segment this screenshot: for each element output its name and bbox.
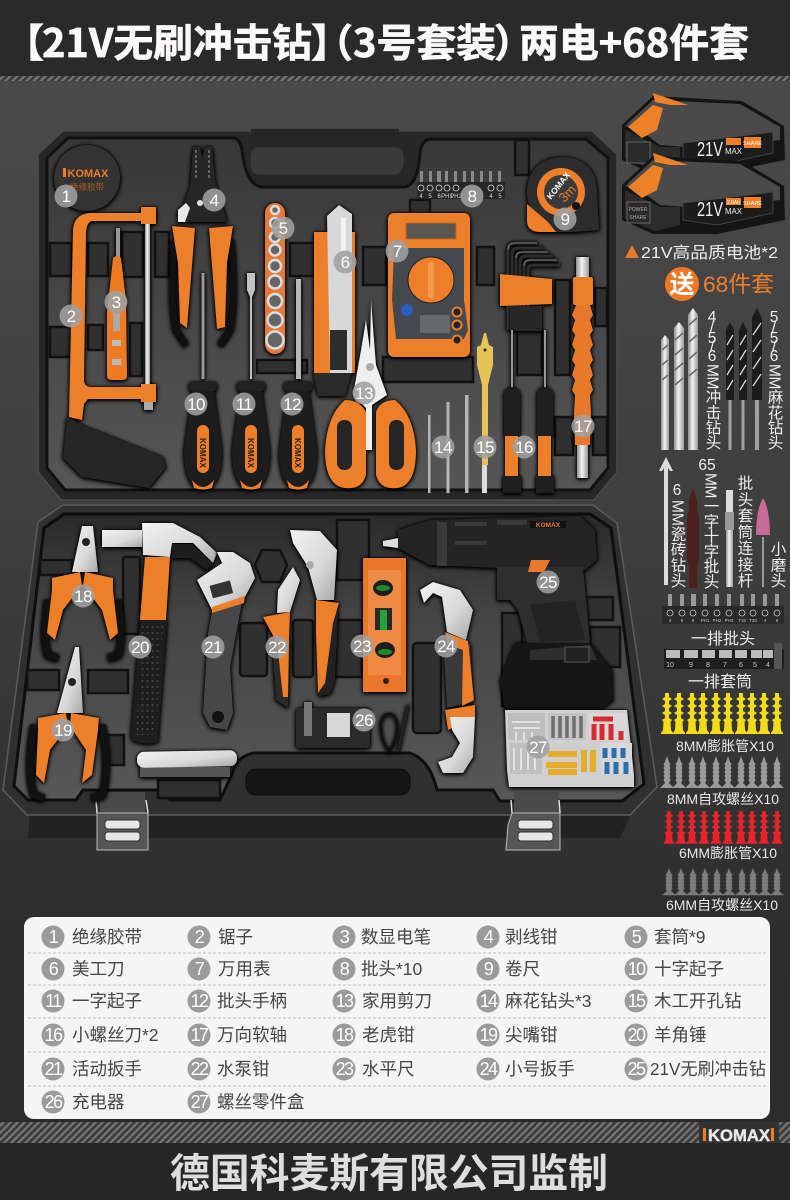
caption: 8MM expansion anchors: 8MM膨胀管X10 — [676, 738, 774, 754]
bit row with labels: 5 — [776, 618, 779, 623]
badge 4: 4 — [210, 191, 219, 210]
legend row 5: 小号扳手 — [505, 1059, 575, 1079]
open tool case: upper lid — [38, 128, 617, 500]
tool 27: screw parts box — [505, 710, 634, 787]
badge 16 — [512, 436, 536, 458]
legend row 2 — [42, 958, 724, 980]
footer KOMAX logo — [699, 1122, 779, 1145]
badge 24: 24 — [437, 637, 455, 656]
badge 3 — [104, 290, 128, 314]
impact drill bits 4/5/6MM — [661, 308, 721, 450]
bit row with labels: 5 — [681, 618, 684, 623]
caption: 6MM self-tapping screws: 6MM自攻螺丝X10 — [666, 897, 778, 913]
tool 6: utility knife — [313, 205, 355, 396]
tool 2: hacksaw — [63, 207, 166, 488]
battery front: SHARE — [629, 215, 647, 221]
legend row 4: 老虎钳 — [362, 1025, 414, 1045]
legend row 6: 27 — [191, 1092, 209, 1112]
tool 11: flat screwdriver: KOMAX — [246, 438, 255, 468]
legend row 4: 万向软轴 — [217, 1025, 287, 1045]
legend row 3: 13 — [336, 991, 354, 1011]
tool 1: insulating tape: 绝缘胶带 — [70, 182, 104, 192]
tool 8: bit row: PH1 — [441, 194, 453, 200]
open tool case: lower tray — [3, 505, 657, 850]
badge 25: 25 — [539, 573, 557, 592]
title: 21V无刷冲击钻 — [42, 13, 312, 69]
tool 1: insulating tape: KOMAX — [68, 168, 109, 180]
tile drill bit 6MM: 6 — [673, 482, 681, 499]
tool 7: digital multimeter — [388, 213, 470, 357]
impact drill bits 4/5/6MM: 4 — [708, 309, 717, 326]
badge 16: 16 — [515, 438, 533, 457]
badge 2: 2 — [67, 307, 76, 326]
legend row 3: 一字起子 — [72, 991, 142, 1011]
free gift badge — [665, 267, 774, 301]
legend row 5: 22 — [191, 1059, 209, 1079]
impact drill bits 4/5/6MM: / — [710, 339, 715, 356]
tool 10: cross screwdriver: KOMAX — [198, 438, 207, 468]
battery caption: 21V高品质电池*2 — [641, 244, 778, 262]
badge 24 — [434, 634, 458, 658]
legend row 4: 尖嘴钳 — [505, 1025, 558, 1045]
tool 8: bit row: 5 — [498, 194, 502, 200]
legend row 5: 水平尺 — [362, 1059, 414, 1079]
legend row 1: 绝缘胶带 — [72, 927, 142, 947]
legend row 1: 3 — [340, 927, 350, 947]
latches — [96, 792, 560, 850]
battery front: POWER — [629, 207, 648, 213]
legend row 4: 羊角锤 — [654, 1025, 706, 1045]
battery front: MAX — [725, 207, 743, 216]
battery front: SHARE — [743, 201, 762, 207]
socket row: 9 — [689, 662, 693, 669]
twist drill bits 5/5/6MM: MM麻花钻头 — [766, 364, 783, 450]
badge 25 — [536, 570, 560, 594]
badge 19 — [52, 718, 74, 742]
badge 13 — [352, 382, 376, 404]
legend row 5: 水泵钳 — [217, 1059, 270, 1079]
tool 8: bit row: 4 — [489, 194, 493, 200]
legend row 5: 23 — [336, 1059, 354, 1079]
badge 14 — [432, 436, 454, 458]
socket row: 8 — [706, 662, 710, 669]
legend row 3 — [42, 990, 742, 1012]
badge 11: 11 — [236, 395, 252, 414]
red 6MM expansion anchors — [664, 811, 782, 844]
bit row with labels: 6 — [692, 618, 695, 623]
legend row 3: 麻花钻头*3 — [505, 991, 592, 1011]
legend row 1: 2 — [195, 927, 205, 947]
tool 18: combination pliers — [45, 526, 121, 658]
legend row 4 — [42, 1024, 706, 1046]
badge 27: 27 — [529, 738, 547, 757]
battery front: 21V — [697, 199, 723, 221]
badge 9: 9 — [561, 210, 570, 229]
legend row 2: 9 — [484, 959, 494, 979]
tool 8: bit row — [417, 171, 505, 200]
legend row 5: 21 — [45, 1059, 63, 1079]
socket adapter rod — [725, 475, 753, 588]
tool 8: bit row: 5 — [428, 194, 432, 200]
legend row 3: 12 — [191, 991, 209, 1011]
badge 11 — [232, 392, 256, 416]
legend row 6: 充电器 — [72, 1092, 124, 1112]
lid tray pockets — [50, 140, 607, 455]
twist drill bits 5/5/6MM: 5 — [770, 309, 778, 326]
carry handle — [246, 769, 410, 795]
badge 27 — [526, 736, 550, 758]
legend row 6 — [42, 1090, 305, 1114]
tool 19: long-nose pliers — [30, 647, 106, 798]
legend row 2: 10 — [628, 959, 646, 979]
impact drill bits 4/5/6MM: 6 — [708, 348, 716, 365]
legend row 5: 21V无刷冲击钻 — [650, 1059, 766, 1079]
badge 6: 6 — [341, 253, 350, 272]
badge 12: 12 — [283, 395, 301, 414]
legend row 4: 20 — [628, 1025, 646, 1045]
twist drill bits 5/5/6MM — [726, 308, 783, 450]
badge 2 — [60, 304, 82, 328]
bit row with labels: PH2 — [713, 618, 722, 623]
legend row 1: 剥线钳 — [505, 927, 558, 947]
badge 8 — [460, 184, 484, 208]
tool 26: charger — [296, 702, 408, 752]
badge 6 — [334, 250, 356, 274]
badge 10 — [184, 392, 208, 416]
legend row 3: 11 — [45, 991, 62, 1011]
tile drill bit 6MM: MM瓷砖钻头 — [668, 500, 686, 588]
tool 17: flexible shaft — [572, 257, 593, 478]
hex key set — [500, 243, 560, 331]
legend row 2: 批头*10 — [361, 959, 423, 979]
tool 23: spirit level — [363, 558, 406, 692]
legend panel — [24, 917, 770, 1119]
badge 17 — [572, 414, 594, 438]
caption: 8MM self-tapping screws: 8MM自攻螺丝X10 — [667, 791, 779, 807]
title: （ — [314, 13, 353, 69]
legend row 2: 美工刀 — [72, 959, 124, 979]
tool 8: bit row: 4 — [419, 194, 423, 200]
badge 15: 15 — [476, 438, 494, 457]
caption: bit row: 一排批头 — [691, 630, 755, 648]
caption: socket row: 一排套筒 — [688, 673, 752, 691]
legend row 4: 19 — [480, 1025, 498, 1045]
legend row 2: 6 — [49, 959, 59, 979]
legend row 2: 十字起子 — [654, 959, 724, 979]
battery front — [622, 153, 785, 234]
twist drill bits 5/5/6MM: 6 — [770, 348, 778, 365]
legend row 3: 木工开孔钻 — [654, 991, 742, 1011]
twist drill bits 5/5/6MM: / — [772, 339, 777, 356]
footer KOMAX logo: KOMAX — [708, 1126, 771, 1145]
legend row 1: 4 — [484, 927, 494, 947]
badge 18 — [72, 584, 94, 608]
badge 21 — [202, 636, 224, 658]
lower tray pockets — [27, 520, 620, 798]
small grinding head — [756, 498, 786, 588]
tool 24: snap wrench — [420, 582, 475, 773]
6MM self-tapping screws — [662, 868, 784, 895]
tool 11: flat screwdriver — [232, 273, 270, 490]
title: ） — [494, 13, 533, 69]
badge 14: 14 — [434, 438, 452, 457]
tool 1: insulating tape — [54, 145, 120, 211]
tool 21: adjustable wrench — [197, 552, 255, 730]
badge 5: 5 — [279, 219, 288, 238]
socket row: 4 — [766, 662, 770, 669]
legend row 1: 锯子 — [218, 927, 253, 947]
legend row 5 — [42, 1058, 766, 1080]
tool 15: spade bit — [477, 333, 493, 493]
battery rear: SHARE — [743, 141, 762, 147]
double-ended bit 65MM: 65 — [698, 457, 716, 474]
badge 26 — [352, 708, 376, 732]
badge 22: 22 — [268, 638, 286, 657]
folding pocket tool — [137, 750, 237, 777]
tool 22: water pump pliers — [263, 530, 339, 708]
impact drill bits 4/5/6MM: / — [710, 319, 715, 336]
badge 17: 17 — [574, 417, 592, 436]
footer bar — [0, 1143, 790, 1200]
number badges on the tools — [52, 184, 594, 758]
legend row 4: 16 — [45, 1025, 63, 1045]
badge 13: 13 — [355, 384, 373, 403]
tool 9: tape measure: KOMAX — [545, 170, 572, 201]
legend row 6: 螺丝零件盒 — [217, 1092, 305, 1112]
socket row: 6 — [739, 662, 743, 669]
badge 22 — [266, 636, 288, 658]
legend row 5: 24 — [480, 1059, 498, 1079]
badge 21: 21 — [204, 638, 222, 657]
socket row — [664, 643, 784, 669]
badge 26: 26 — [355, 711, 373, 730]
badge 5 — [272, 216, 294, 240]
legend row 1 — [42, 926, 706, 948]
tool 13: scissors — [325, 300, 416, 488]
tool 4: wire stripper pliers — [172, 147, 233, 345]
battery rear: MAX — [725, 147, 743, 156]
twist drill bits 5/5/6MM: / — [772, 319, 777, 336]
badge 8: 8 — [468, 187, 477, 206]
free gift badge: 送 — [669, 271, 695, 299]
free gift badge: 68件套 — [703, 272, 774, 297]
title: 【 — [5, 13, 44, 69]
title: 】 — [311, 13, 350, 69]
bit row with labels: PH1 — [701, 618, 710, 623]
legend row 6: 26 — [45, 1092, 63, 1112]
legend row 3: 14 — [480, 991, 498, 1011]
footer hatch band — [0, 1122, 790, 1143]
footer text: 德国科麦斯有限公司监制 — [170, 1152, 608, 1196]
bit row with labels: PH3 — [725, 618, 734, 623]
badge 20: 20 — [131, 638, 149, 657]
tool 9: tape measure: 3m — [556, 182, 579, 205]
battery rear — [622, 93, 785, 174]
legend row 5: 25 — [628, 1059, 646, 1079]
double-ended bit 65MM — [687, 457, 719, 589]
tool 8: bit row: PH2 — [450, 194, 462, 200]
legend row 5: 活动扳手 — [72, 1059, 142, 1079]
socket row: 7 — [723, 662, 727, 669]
impact drill bits 4/5/6MM: MM冲击钻头 — [704, 364, 721, 450]
badge 9 — [554, 208, 576, 230]
tool 14: twist drill bits — [428, 395, 468, 493]
badge 1: 1 — [62, 187, 71, 206]
badge 1 — [54, 184, 78, 208]
legend row 2: 7 — [195, 959, 205, 979]
socket adapter rod: 批头套筒连接杆 — [736, 475, 753, 588]
badge 7 — [386, 240, 408, 262]
badge 23 — [350, 634, 374, 658]
legend row 1: 5 — [632, 927, 642, 947]
tool 5: socket set — [265, 203, 285, 354]
socket row: 10 — [666, 662, 674, 669]
title: 3号套装 — [353, 13, 496, 69]
bit row with labels — [662, 594, 784, 624]
legend row 4: 小螺丝刀*2 — [72, 1025, 159, 1045]
bit row with labels: 4 — [669, 618, 672, 623]
tool 20: claw hammer — [102, 523, 217, 744]
tool 12: bit handle: KOMAX — [293, 438, 302, 468]
badge 7: 7 — [393, 242, 402, 261]
tile drill bit 6MM — [659, 457, 686, 588]
legend row 2: 卷尺 — [505, 959, 540, 979]
tool 9: tape measure — [527, 157, 599, 232]
badge 19: 19 — [54, 721, 72, 740]
8MM self-tapping screws — [660, 756, 784, 788]
impact drill bits 4/5/6MM: 5 — [708, 330, 716, 347]
legend row 3: 15 — [628, 991, 646, 1011]
badge 20 — [128, 636, 152, 658]
badge 23: 23 — [353, 637, 371, 656]
legend row 1: 1 — [49, 927, 59, 947]
socket row: 5 — [753, 662, 757, 669]
legend row 2: 万用表 — [218, 959, 270, 979]
legend row 1: 数显电笔 — [361, 927, 431, 947]
badge 12 — [280, 392, 304, 416]
tool 25: cordless impact drill: KOMAX — [536, 522, 561, 529]
small grinding head: 小磨头 — [768, 541, 786, 588]
title — [5, 13, 749, 69]
double-ended bit 65MM: MM一字十字批头 — [702, 473, 719, 589]
yellow 8MM expansion anchors — [661, 693, 783, 734]
title: 两电+68件套 — [519, 13, 749, 69]
legend row 1: 套筒*9 — [654, 927, 706, 947]
badge 10: 10 — [187, 395, 205, 414]
header bar — [0, 0, 790, 81]
tool 25: cordless impact drill — [383, 516, 613, 710]
legend row 3: 家用剪刀 — [362, 991, 432, 1011]
tool 3: voltage tester pen — [107, 228, 127, 380]
badge 3: 3 — [112, 293, 121, 312]
battery front: 2.0Ah — [727, 200, 740, 206]
badge 4 — [202, 188, 226, 212]
badge 15 — [474, 436, 496, 458]
tool 10: cross screwdriver — [184, 273, 222, 490]
battery rear: 21V — [697, 139, 723, 161]
legend row 2: 8 — [340, 959, 350, 979]
twist drill bits 5/5/6MM: 5 — [770, 330, 778, 347]
bit row with labels: 4 — [764, 618, 767, 623]
bit row with labels: T15 — [738, 618, 746, 623]
bit row with labels: T20 — [749, 618, 757, 623]
legend row 3: 批头手柄 — [217, 991, 287, 1011]
tool 12: bit handle — [279, 279, 317, 490]
caption: 6MM expansion anchors: 6MM膨胀管X10 — [679, 845, 777, 861]
legend row 4: 17 — [191, 1025, 209, 1045]
badge 18: 18 — [74, 587, 92, 606]
legend row 4: 18 — [336, 1025, 354, 1045]
tool 16: small screwdrivers — [503, 330, 554, 493]
tool 8: bit row: 6 — [437, 194, 441, 200]
